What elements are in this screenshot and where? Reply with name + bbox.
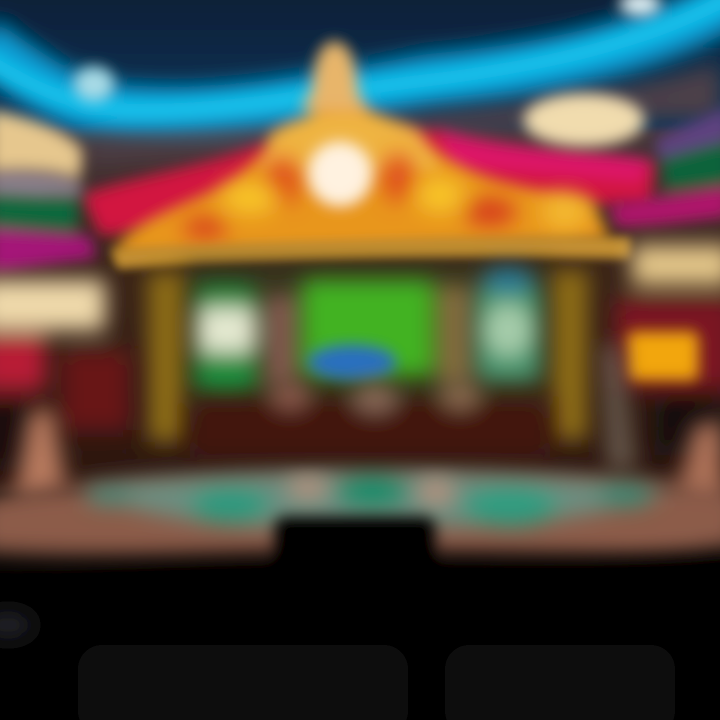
- blue screen panel: [308, 345, 396, 379]
- clock medallion: [308, 142, 372, 206]
- magenta and red canopy: [82, 130, 655, 235]
- bottom dark foreground: [0, 545, 720, 720]
- background: night ceiling: [0, 0, 720, 160]
- background: interior room: [0, 130, 720, 490]
- neon cyan arc core: [0, 0, 720, 110]
- gold pillars: [148, 270, 588, 442]
- gold lintel: [112, 238, 630, 268]
- neon cyan arc: [0, 0, 720, 113]
- centre silhouette: [274, 516, 436, 606]
- golden crown facade: [115, 42, 610, 255]
- slot screens: [195, 268, 540, 393]
- right striped awning: [610, 106, 720, 226]
- ceiling lights: [74, 0, 660, 101]
- seating row: [190, 381, 550, 456]
- foreground seat shapes: [0, 611, 675, 720]
- left wall panel and lights: [0, 280, 130, 470]
- right wall panel and lights: [615, 245, 720, 455]
- left striped awning: [0, 110, 96, 272]
- green felt table: [80, 472, 670, 526]
- facade accents: [183, 154, 589, 240]
- amber sign: [628, 332, 698, 380]
- screen backdrop: [185, 265, 550, 425]
- cream dome lamp right: [524, 94, 644, 146]
- raised arms: [14, 345, 720, 510]
- grey band beneath arc: [85, 62, 720, 160]
- table rim: [0, 474, 720, 560]
- table highlights: [286, 476, 456, 506]
